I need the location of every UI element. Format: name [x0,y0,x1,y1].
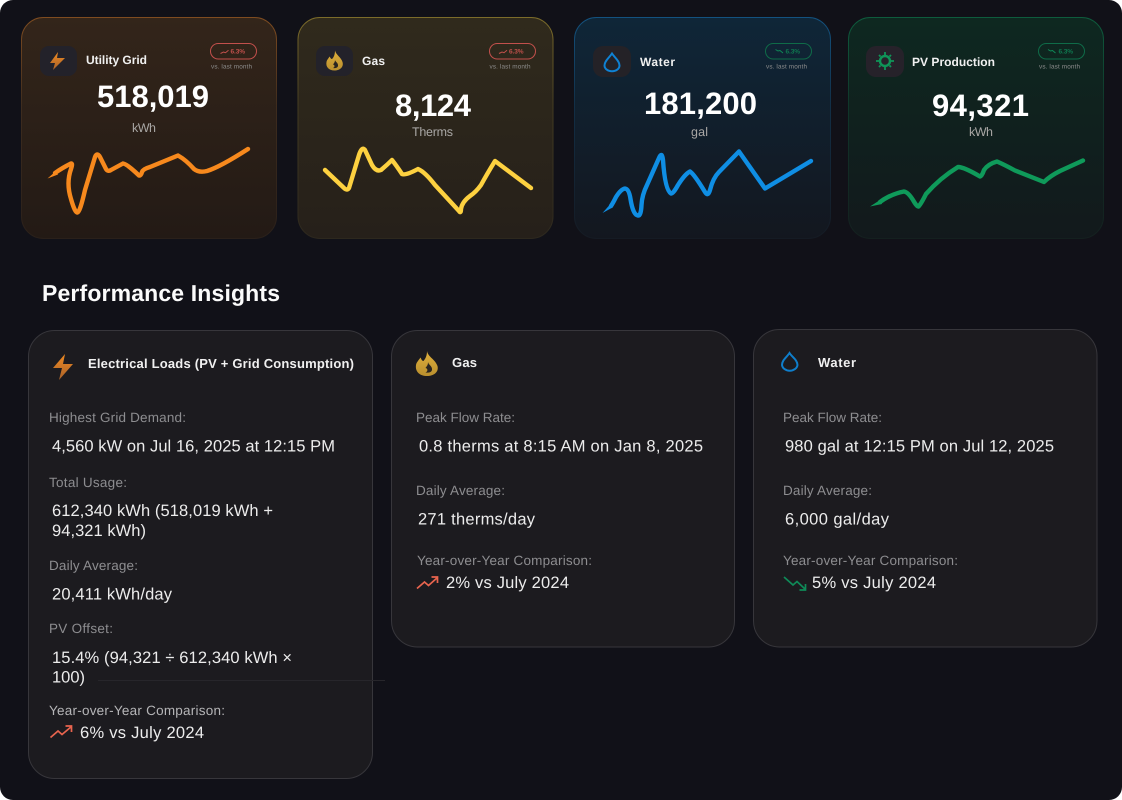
metric: highest grid demand: Highest Grid Demand: [49,410,186,425]
metric: daily average [49,558,173,604]
metric: year-over-year comparison [783,553,958,592]
trend badge: gas: 6.3% [509,48,524,56]
metric: pv offset: 100) [52,668,85,686]
icon: trend up arrow [50,726,72,738]
metric: total usage [49,475,273,540]
card title: utility grid: Utility Grid [86,53,147,67]
metric: daily average: 271 therms/day [418,510,536,528]
icon: water drop tile [593,46,631,77]
panel: water insights [754,330,1097,647]
metric: peak flow rate: 0.8 therms at 8:15 AM on Jan 8, 2025 [419,438,703,456]
panel: gas card [298,18,553,238]
metric: year-over-year comparison: Year-over-Year Comparison: [783,553,958,568]
trend badge: utility grid: 6.3% [230,48,245,56]
sparkline: pv production [870,160,1083,207]
panel: water card [574,18,830,238]
icon: sun gear tile [866,46,904,77]
metric value: water: 181,200 [644,86,757,121]
metric: total usage: 94,321 kWh) [52,522,146,540]
panel title: gas: Gas [452,355,477,370]
unit: therms: Therms [412,125,453,139]
metric: daily average: Daily Average: [49,558,138,573]
icon: flame tile [316,46,353,76]
panel: pv production card [848,18,1104,238]
trend badge: gas: vs. last month [490,64,531,70]
metric: total usage: Total Usage: [49,475,127,490]
unit: gal: gal [691,125,708,139]
card title: pv production: PV Production [912,55,995,69]
metric: peak flow rate: Peak Flow Rate: [416,410,515,425]
icon: flame [416,351,438,376]
trend badge: water [766,44,812,70]
heading: performance insights: Performance Insights [42,280,280,306]
metric: daily average: Daily Average: [783,483,872,498]
trend badge: water: vs. last month [766,64,807,70]
metric: year-over-year comparison: 2% vs July 2024 [446,574,569,592]
metric: highest grid demand: 4,560 kW on Jul 16, 2025 at 12:15 PM [52,438,335,456]
sparkline: gas [325,149,531,212]
metric: highest grid demand [49,410,335,456]
trend badge: pv production: vs. last month [1039,64,1080,70]
metric: year-over-year comparison: 5% vs July 2024 [812,574,936,592]
metric: daily average [416,483,536,528]
trend badge: pv production: 6.3% [1058,48,1073,56]
metric: peak flow rate [783,410,1054,456]
panel: electrical loads [28,330,385,778]
unit: kWh: kWh [969,125,993,139]
metric value: utility grid: 518,019 [97,79,209,114]
panel title: electrical loads: Electrical Loads (PV + Grid Consumption) [88,356,354,371]
panel: utility grid card [22,18,276,238]
metric: year-over-year comparison: Year-over-Year Comparison: [417,553,592,568]
metric: peak flow rate: 980 gal at 12:15 PM on Jul 12, 2025 [785,438,1054,456]
metric: total usage: 612,340 kWh (518,019 kWh + [52,502,273,520]
metric: peak flow rate: Peak Flow Rate: [783,410,882,425]
sparkline: water [602,152,811,216]
trend badge: utility grid [210,44,256,70]
divider [98,680,385,681]
icon: lightning bolt [53,354,73,380]
sparkline: utility grid [48,149,248,213]
metric: daily average [783,483,890,528]
icon: trend up arrow [417,577,438,588]
metric: pv offset: 15.4% (94,321 ÷ 612,340 kWh × [52,649,292,667]
trend badge: gas [490,44,536,70]
metric value: gas: 8,124 [395,88,472,123]
trend badge: water: 6.3% [786,48,800,56]
metric: pv offset: PV Offset: [49,621,113,636]
metric: year-over-year comparison: 6% vs July 2024 [80,724,204,742]
metric: peak flow rate [416,410,703,456]
icon: trend down arrow [784,577,806,590]
icon: water drop [782,353,798,371]
metric: year-over-year comparison [417,553,592,592]
metric value: pv production: 94,321 [932,88,1029,123]
metric: year-over-year comparison: Year-over-Year Comparison: [49,703,225,718]
metric: pv offset [49,621,292,686]
metric: year-over-year comparison [49,703,225,742]
metric: daily average: 6,000 gal/day [785,510,890,528]
panel: gas insights [392,330,734,647]
trend badge: pv production [1038,44,1084,70]
metric: daily average: Daily Average: [416,483,505,498]
card title: water: Water [640,55,675,69]
trend badge: utility grid: vs. last month [211,64,252,70]
unit: kWh: kWh [132,121,156,135]
icon: lightning bolt tile [40,46,77,76]
card title: gas: Gas [362,54,385,68]
panel title: water: Water [818,355,856,370]
metric: daily average: 20,411 kWh/day [52,586,173,604]
